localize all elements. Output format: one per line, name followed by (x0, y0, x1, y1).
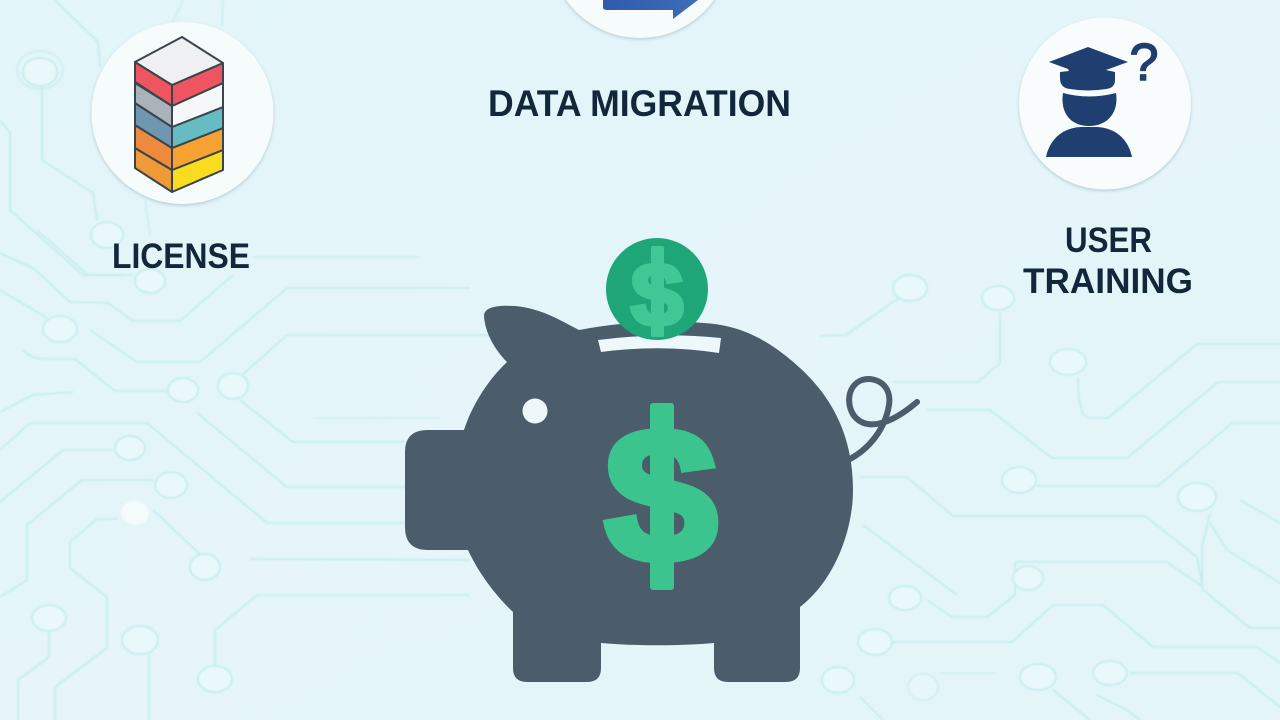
white circle badge (549, 0, 731, 38)
question mark: ? (1130, 34, 1158, 92)
icon: stacked license blocks (135, 37, 223, 192)
coin slot (598, 335, 721, 353)
white circle badge (1019, 18, 1191, 190)
pig body (405, 306, 853, 682)
heading: license: LICENSE (112, 237, 250, 276)
coin: $ (631, 244, 683, 346)
heading: user training: TRAINING (1023, 262, 1193, 301)
heading: user training: USER (1065, 221, 1152, 260)
icon: graduate with question mark (1046, 34, 1158, 157)
piggy bank (405, 238, 917, 682)
heading: data migration: DATA MIGRATION (488, 83, 791, 124)
pig eye (522, 398, 548, 424)
coin (606, 238, 708, 346)
panel: user training icon (1019, 18, 1191, 190)
panel: license icon (92, 22, 274, 204)
heading: user training (1023, 221, 1193, 301)
icon: blue migration arrow (603, 0, 698, 19)
dollar sign: $ (605, 390, 717, 602)
pig tail (848, 379, 917, 460)
panel: data migration icon (549, 0, 731, 38)
white circle badge (92, 22, 274, 204)
